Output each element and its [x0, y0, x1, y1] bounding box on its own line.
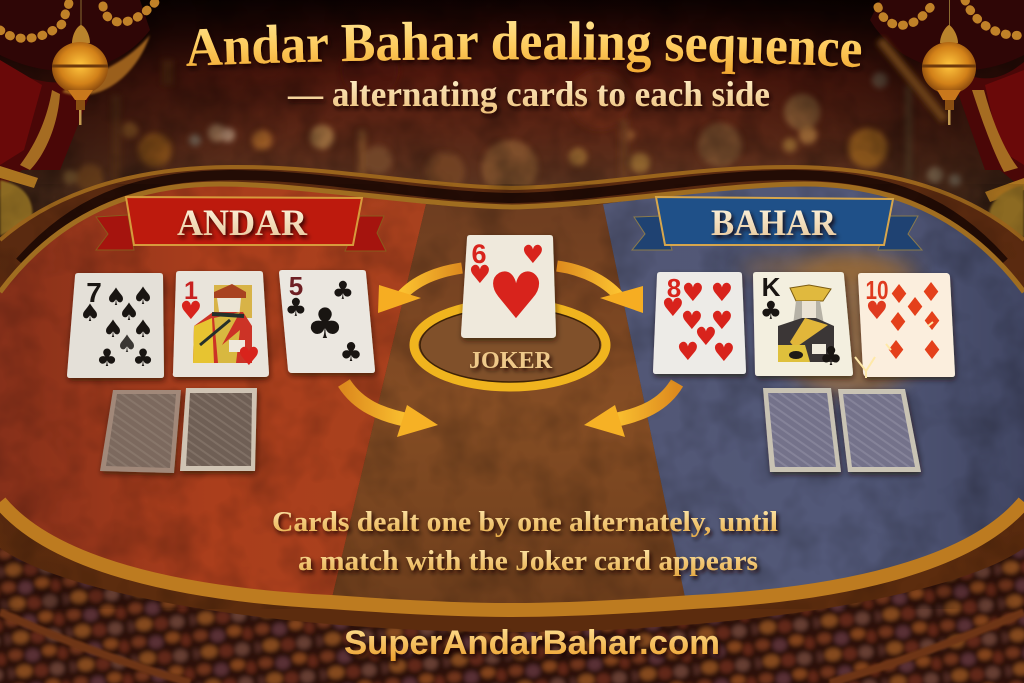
felt: red Andar side [0, 184, 426, 602]
card: seven of spades: ♠ [79, 299, 101, 327]
card: seven of spades: ♠ [118, 298, 140, 326]
label: JOKER: JOKER [469, 348, 553, 374]
caption line 1: Cards dealt one by one alternately, until [272, 506, 778, 538]
card: ten of diamonds: ♦ [920, 307, 944, 337]
joker card: six of hearts [461, 235, 556, 338]
warm glow near ten card [770, 255, 930, 395]
glow under blue felt top [740, 254, 920, 282]
card: seven of spades: ♣ [96, 344, 118, 372]
arrow: Bahar to centre [584, 383, 677, 437]
garland beads left [0, 0, 157, 38]
card backs: Bahar pile [763, 388, 921, 472]
card: jack of hearts [173, 271, 269, 377]
card: seven of spades: ♠ [102, 315, 124, 343]
arrow: joker to Andar [378, 268, 462, 313]
card: eight of hearts [653, 272, 746, 374]
card: eight of hearts: ♥ [695, 322, 717, 351]
card: eight of hearts: 8 [667, 273, 681, 303]
card: eight of hearts: ♥ [677, 337, 699, 366]
card: seven of spades: ♠ [105, 283, 127, 311]
card back 4 [838, 389, 921, 472]
card: five of clubs: ♣ [339, 338, 363, 368]
joker card: six of hearts: ♥ [487, 260, 545, 334]
bokeh lights [63, 42, 961, 196]
sparkle near ten card [855, 322, 933, 378]
card: five of clubs: ♣ [285, 293, 307, 322]
card: king of clubs: ♣ [760, 296, 782, 325]
card: king of clubs: K [762, 272, 781, 302]
card: eight of hearts: ♥ [682, 278, 704, 307]
icon: right hanging lantern [922, 0, 976, 125]
court figure: king [778, 285, 834, 362]
title line 2: — alternating cards to each side [287, 74, 770, 114]
card: ten of diamonds: ♦ [919, 278, 943, 308]
card: seven of spades: ♠ [132, 282, 154, 310]
card: king of clubs: ♣ [819, 342, 843, 372]
card back 3 [763, 388, 841, 472]
card: five of clubs: ♣ [332, 276, 354, 305]
joker card: six of hearts: 6 [471, 239, 487, 269]
caption [272, 506, 778, 577]
card: ten of diamonds: ♦ [886, 308, 910, 338]
card: five of clubs [279, 270, 375, 373]
label: ANDAR: ANDAR [177, 203, 308, 244]
card: eight of hearts: ♥ [711, 306, 733, 335]
felt: blue Bahar side [603, 184, 1024, 602]
joker card: six of hearts: ♥ [522, 240, 544, 269]
banner: BAHAR [632, 197, 922, 250]
arrow: Andar to centre [344, 383, 438, 437]
garland beads right [878, 0, 1024, 35]
table front gold band [0, 502, 1024, 610]
card: eight of hearts: ♥ [681, 306, 703, 335]
icon: left hanging lantern [52, 0, 108, 125]
table wooden rim [0, 167, 1024, 632]
title line 1: Andar Bahar dealing sequence [186, 21, 863, 80]
card: seven of spades: ♠ [132, 315, 154, 343]
card: seven of spades: ♣ [132, 344, 154, 372]
joker card: six of hearts: ♥ [469, 260, 491, 289]
card: ten of diamonds: ♦ [887, 280, 911, 310]
card: ten of diamonds: ♦ [920, 336, 944, 366]
card back 1 [100, 390, 181, 473]
felt texture [0, 184, 1024, 609]
card: ten of diamonds [858, 273, 955, 377]
joker ring [414, 303, 606, 387]
card: eight of hearts: ♥ [711, 278, 733, 307]
card: eight of hearts: ♥ [713, 338, 735, 367]
card: eight of hearts: ♥ [662, 293, 684, 322]
card: ten of diamonds: ♦ [903, 293, 927, 323]
banner: ANDAR [96, 197, 386, 251]
card: jack of hearts: ♥ [238, 342, 260, 371]
table dark groove [20, 175, 1004, 262]
card: ten of diamonds: ♥ [866, 296, 888, 325]
card: five of clubs: ♣ [306, 299, 344, 348]
card: seven of spades [67, 273, 164, 378]
table [0, 167, 1024, 632]
carpet floor [0, 500, 1024, 683]
caption line 2: a match with the Joker card appears [298, 545, 758, 577]
footer website: SuperAndarBahar.com [344, 624, 720, 662]
table inner gold line [0, 184, 1024, 292]
card: jack of hearts: ♥ [180, 296, 202, 325]
card backs: Andar pile [100, 388, 257, 473]
court figure: queen [193, 284, 252, 363]
felt: brown joker centre [331, 204, 686, 607]
card: seven of spades: ♠ [116, 330, 138, 358]
title [186, 21, 863, 118]
curtain: top-right with garland [870, 0, 1024, 238]
card: seven of spades: 7 [86, 277, 102, 308]
card back 2 [180, 388, 257, 471]
card: ten of diamonds: ♦ [884, 336, 908, 366]
card: ten of diamonds: 10 [866, 275, 888, 305]
card: jack of hearts: 1 [184, 277, 198, 305]
table outer gold edge [0, 167, 1024, 240]
curtain: top-left with garland [0, 0, 157, 236]
card: king of clubs [753, 272, 853, 376]
label: BAHAR: BAHAR [711, 203, 837, 244]
card: five of clubs: 5 [289, 271, 303, 301]
arrow: joker to Bahar [557, 266, 643, 313]
